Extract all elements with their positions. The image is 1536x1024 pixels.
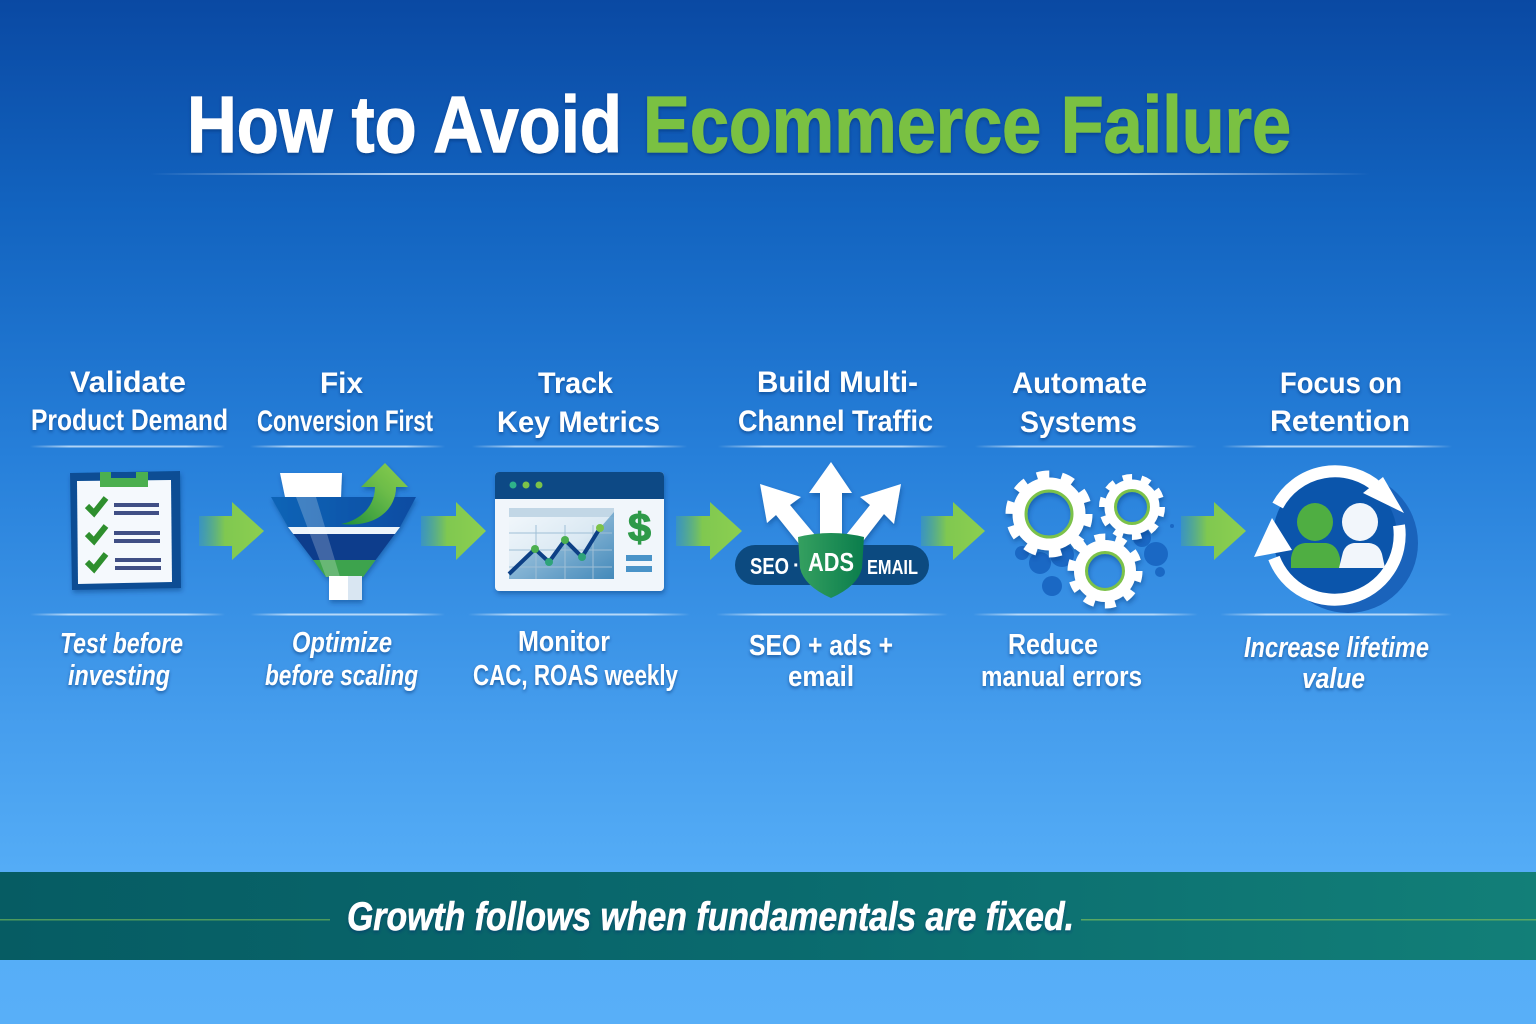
step 2 heading: Fix bbox=[320, 367, 363, 400]
title underline bbox=[150, 173, 1370, 175]
arrow 1 bbox=[199, 502, 264, 560]
step 3 caption bbox=[473, 626, 678, 692]
step 5 heading: Automate bbox=[1012, 367, 1147, 400]
step 2 caption: before scaling bbox=[265, 660, 418, 692]
title: Ecommerce Failure bbox=[643, 80, 1291, 169]
step 1 heading bbox=[31, 366, 228, 437]
bottom banner bbox=[0, 872, 1536, 960]
step 3 heading bbox=[497, 367, 660, 439]
icon: clipboard checklist bbox=[70, 471, 181, 590]
step 4 caption bbox=[749, 630, 893, 693]
step 4 heading: Channel Traffic bbox=[738, 405, 933, 438]
icon: metrics dashboard: $ bbox=[628, 506, 651, 550]
title bbox=[187, 80, 1291, 169]
arrow 5 bbox=[1181, 502, 1246, 560]
step 1 caption: Test before bbox=[60, 628, 183, 660]
step 6 caption bbox=[1244, 632, 1429, 695]
icon: multi-channel traffic: ADS bbox=[808, 547, 854, 577]
icon: automation gears bbox=[1010, 475, 1174, 604]
arrow 3 bbox=[676, 502, 742, 560]
step 6 caption: value bbox=[1302, 663, 1365, 695]
step 4 heading bbox=[738, 366, 933, 438]
step 1 heading: Validate bbox=[70, 366, 186, 399]
step 3 heading: Track bbox=[538, 367, 613, 400]
icon: conversion funnel bbox=[271, 463, 418, 606]
icon: multi-channel traffic: · bbox=[793, 555, 800, 577]
step 6 heading bbox=[1270, 367, 1410, 438]
step 1 heading: Product Demand bbox=[31, 404, 228, 437]
step 2 heading bbox=[257, 367, 433, 438]
step 2 caption: Optimize bbox=[292, 627, 392, 659]
step 5 caption: Reduce bbox=[1008, 629, 1098, 661]
step 3 heading: Key Metrics bbox=[497, 406, 660, 439]
step 2 caption bbox=[265, 627, 418, 692]
arrow 2 bbox=[421, 502, 486, 560]
step 3 caption: Monitor bbox=[518, 626, 610, 658]
step 5 heading: Systems bbox=[1020, 406, 1137, 439]
step 6 heading: Retention bbox=[1270, 405, 1410, 438]
step 5 heading bbox=[1012, 367, 1147, 439]
icon: customer retention bbox=[1254, 471, 1418, 613]
title: How to Avoid bbox=[187, 80, 622, 169]
step 5 caption: manual errors bbox=[981, 661, 1142, 693]
step 4 caption: email bbox=[788, 661, 854, 693]
step 2 heading: Conversion First bbox=[257, 405, 433, 438]
icon: metrics dashboard bbox=[495, 472, 664, 591]
arrow 4 bbox=[921, 502, 985, 560]
step 6 heading: Focus on bbox=[1280, 367, 1402, 400]
banner tagline: Growth follows when fundamentals are fixed. bbox=[347, 895, 1074, 939]
step 5 caption bbox=[981, 629, 1142, 693]
step 1 caption bbox=[60, 628, 183, 692]
icon: multi-channel traffic: EMAIL bbox=[867, 557, 918, 579]
step 4 caption: SEO + ads + bbox=[749, 630, 893, 662]
step 6 caption: Increase lifetime bbox=[1244, 632, 1429, 664]
icon: multi-channel traffic: SEO bbox=[750, 553, 789, 579]
icon: multi-channel traffic bbox=[735, 462, 929, 598]
step 3 caption: CAC, ROAS weekly bbox=[473, 660, 678, 692]
step 1 caption: investing bbox=[68, 660, 170, 692]
step 4 heading: Build Multi- bbox=[757, 366, 918, 399]
